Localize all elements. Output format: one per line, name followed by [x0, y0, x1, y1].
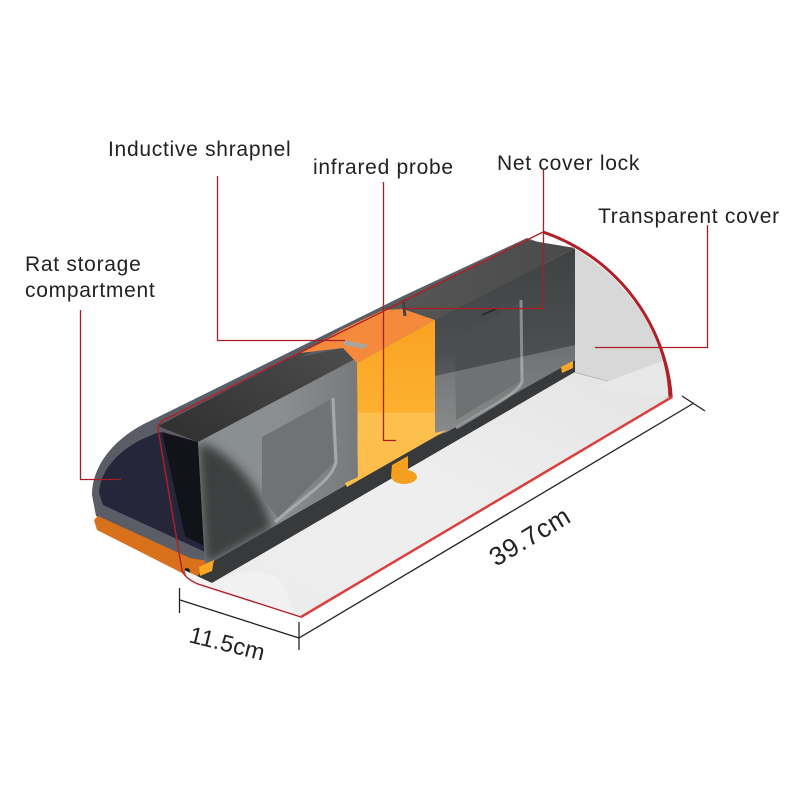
dimension: width line: [180, 588, 299, 650]
leader: rat storage compartment: [80, 310, 121, 480]
label: rat storage compartment: compartment: [25, 279, 155, 302]
wall shadow lower left: [198, 442, 272, 566]
door window right: [455, 302, 522, 420]
orange foot: [391, 456, 417, 484]
rear dome: rat storage compartment: [92, 238, 560, 562]
top of box, left section: [158, 299, 403, 442]
leader: infrared probe: [384, 182, 396, 440]
label: net cover lock: Net cover lock: [497, 152, 640, 175]
transparent dome end, right: [543, 234, 670, 398]
dimension: length line: [299, 396, 705, 638]
floor: [200, 372, 672, 617]
screw: [184, 568, 190, 574]
orange top of sensor block: [300, 309, 435, 363]
base strip: [196, 360, 575, 583]
label: transparent cover: Transparent cover: [598, 205, 780, 228]
product illustration: rat trap: [92, 232, 672, 617]
transparent cover, red edge: [158, 232, 672, 617]
orange clip right: [561, 361, 573, 373]
orange end clip left: [199, 560, 214, 576]
left side wall: [198, 358, 358, 566]
orange base plate: [94, 516, 214, 581]
label: infrared probe: infrared probe: [313, 156, 454, 179]
orange sensor block: [345, 320, 447, 487]
leader: net cover lock: [403, 170, 544, 308]
leader: transparent cover: [595, 225, 708, 348]
leader: inductive shrapnel: [218, 176, 345, 340]
door window left: [262, 400, 334, 518]
rear top surface right: [403, 240, 575, 320]
dimension: length value: 39.7cm: [484, 500, 576, 572]
opening of box: [162, 432, 204, 546]
dimension: width value: 11.5cm: [187, 622, 268, 666]
label: rat storage compartment: Rat storage: [25, 253, 141, 276]
light reflection on right wall: [435, 345, 575, 436]
right side wall: [435, 248, 575, 436]
label: inductive shrapnel: Inductive shrapnel: [108, 138, 291, 161]
